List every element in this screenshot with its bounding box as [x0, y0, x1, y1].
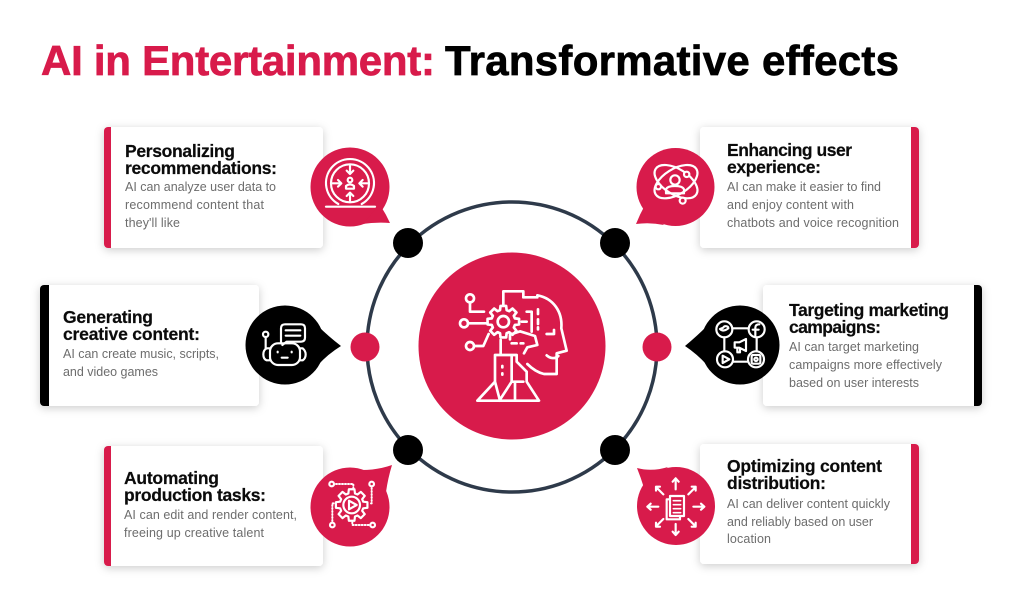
body text: and video games — [63, 365, 158, 379]
card background — [700, 127, 919, 248]
body text: they'll like — [125, 216, 180, 230]
card background — [40, 285, 259, 406]
central disc — [418, 252, 606, 440]
node: middle right — [642, 332, 672, 362]
icon bubble: automating tasks — [310, 465, 392, 546]
heading — [727, 140, 852, 177]
card accent bar — [974, 285, 982, 406]
heading: distribution: — [727, 473, 826, 493]
card background — [700, 444, 919, 564]
central ring — [367, 202, 657, 492]
body text — [727, 180, 899, 230]
heading — [125, 141, 277, 178]
card accent bar — [40, 285, 49, 406]
heading: campaigns: — [789, 317, 881, 337]
body text — [125, 180, 276, 230]
card accent bar — [911, 127, 919, 248]
heading — [727, 456, 882, 493]
body text: AI can analyze user data to — [125, 180, 276, 194]
panel: optimizing content distribution — [700, 444, 919, 564]
heading: experience: — [727, 157, 821, 177]
card background — [104, 446, 323, 566]
card accent bar — [911, 444, 919, 564]
heading: Automating — [124, 468, 219, 488]
card background — [104, 127, 323, 248]
body text: campaigns more effectively — [789, 358, 943, 372]
heading — [63, 307, 200, 344]
icon bubble: personalizing — [310, 148, 390, 226]
heading: Personalizing — [125, 141, 235, 161]
panel: personalizing recommendations — [104, 127, 323, 248]
heading: creative content: — [63, 324, 200, 344]
card accent bar — [104, 127, 111, 248]
title: AI in Entertainment: — [41, 37, 435, 84]
icon bubble: generating content — [246, 306, 341, 384]
node: top right — [600, 228, 630, 258]
body text: AI can edit and render content, — [124, 508, 297, 522]
body text: location — [727, 532, 771, 546]
heading: Generating — [63, 307, 153, 327]
body text: based on user interests — [789, 376, 919, 390]
body text: AI can deliver content quickly — [727, 497, 891, 511]
panel: automating production tasks — [104, 446, 323, 566]
icon: AI head with gear and circuits — [460, 291, 567, 401]
heading — [789, 300, 949, 337]
panel: enhancing user experience — [700, 127, 919, 248]
heading: Targeting marketing — [789, 300, 949, 320]
heading: Optimizing content — [727, 456, 882, 476]
title: Transformative effects — [445, 37, 899, 84]
body text — [727, 497, 891, 546]
node: bottom left — [393, 435, 423, 465]
heading — [124, 468, 266, 505]
panel: generating creative content — [40, 285, 259, 406]
heading: Enhancing user — [727, 140, 852, 160]
node: middle left — [350, 332, 380, 362]
icon bubble: targeting marketing — [685, 306, 780, 384]
node: bottom right — [600, 435, 630, 465]
icon bubble: enhancing experience — [636, 148, 714, 226]
body text: AI can target marketing — [789, 340, 919, 354]
body text: recommend content that — [125, 198, 265, 212]
body text — [124, 508, 297, 540]
heading: production tasks: — [124, 485, 266, 505]
panel: targeting marketing campaigns — [763, 285, 982, 406]
body text: AI can make it easier to find — [727, 180, 881, 194]
body text: freeing up creative talent — [124, 526, 265, 540]
body text: chatbots and voice recognition — [727, 216, 899, 230]
body text — [789, 340, 943, 390]
card accent bar — [104, 446, 111, 566]
body text — [63, 347, 219, 379]
body text: AI can create music, scripts, — [63, 347, 219, 361]
card background — [763, 285, 982, 406]
title — [41, 37, 899, 84]
body text: and reliably based on user — [727, 515, 873, 529]
body text: and enjoy content with — [727, 198, 854, 212]
heading: recommendations: — [125, 158, 277, 178]
node: top left — [393, 228, 423, 258]
icon bubble: optimizing distribution — [637, 467, 715, 545]
